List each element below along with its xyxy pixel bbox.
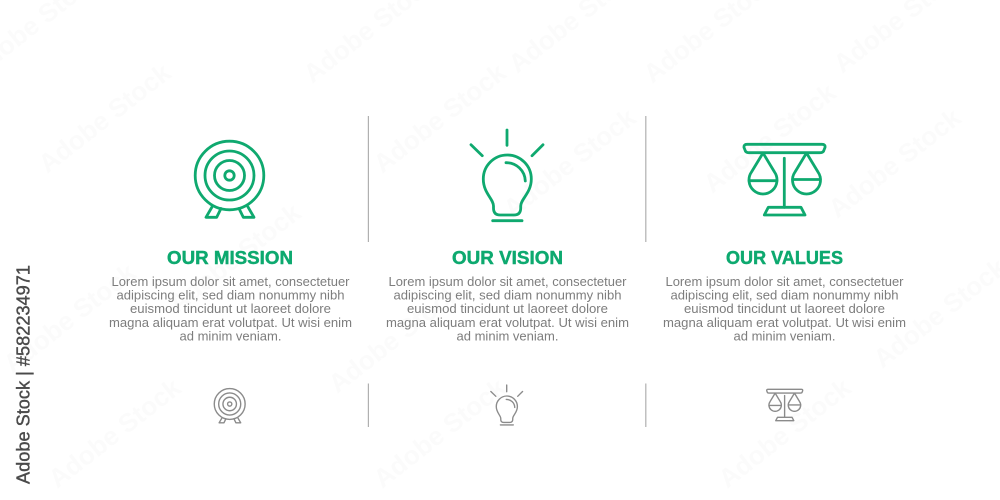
watermark pattern: Adobe Stock (713, 372, 857, 494)
watermark pattern: Adobe Stock (368, 372, 512, 494)
heading: our values: OUR VALUES (726, 247, 843, 268)
icon: target (195, 141, 264, 217)
icon: small light bulb (491, 385, 523, 425)
text block: values: magna aliquam erat volutpat. Ut wisi enim (663, 315, 906, 330)
text block: values: ad minim veniam. (734, 328, 836, 343)
divider: upper right (645, 116, 646, 242)
watermark pattern: Adobe Stock (43, 372, 187, 494)
text block: mission: ad minim veniam. (180, 328, 282, 343)
text block: vision: euismod tincidunt ut laoreet dolore (407, 301, 608, 316)
icon: light bulb (471, 130, 543, 221)
divider: lower left (368, 384, 369, 427)
text block: values: euismod tincidunt ut laoreet dolore (684, 301, 885, 316)
watermark pattern: Adobe Stock (498, 102, 642, 224)
heading: our vision: OUR VISION (452, 247, 563, 268)
watermark pattern: Adobe Stock (33, 57, 177, 179)
text block: vision: adipiscing elit, sed diam nonummy nibh (394, 288, 622, 303)
text block: mission: euismod tincidunt ut laoreet dolore (130, 301, 331, 316)
text block: vision (386, 274, 629, 343)
watermark pattern: Adobe Stock (823, 102, 967, 224)
divider: upper left (368, 116, 369, 242)
watermark pattern: Adobe Stock (0, 257, 142, 379)
text block: values: Lorem ipsum dolor sit amet, consectetuer (666, 274, 904, 289)
watermark pattern: Adobe Stock (163, 197, 307, 319)
stock id label: Adobe Stock | #582234971 (12, 265, 34, 484)
watermark pattern: Adobe Stock (698, 77, 842, 199)
icon: balance scale (744, 144, 825, 215)
heading: our mission: OUR MISSION (167, 247, 293, 268)
icon: small target (214, 389, 245, 423)
text block: mission: Lorem ipsum dolor sit amet, consectetuer (112, 274, 350, 289)
watermark pattern: Adobe Stock (368, 57, 512, 179)
text block: mission: adipiscing elit, sed diam nonummy nibh (116, 288, 344, 303)
divider: lower right (645, 384, 646, 427)
text block: vision: magna aliquam erat volutpat. Ut wisi enim (386, 315, 629, 330)
icon: small balance scale (767, 389, 803, 421)
text block: mission (109, 274, 352, 343)
text block: vision: Lorem ipsum dolor sit amet, consectetuer (388, 274, 627, 289)
text block: mission: magna aliquam erat volutpat. Ut wisi enim (109, 315, 352, 330)
text block: values: adipiscing elit, sed diam nonummy nibh (670, 288, 898, 303)
text block: values (663, 274, 906, 343)
text block: vision: ad minim veniam. (456, 328, 558, 343)
watermark pattern: Adobe Stock (323, 277, 467, 399)
